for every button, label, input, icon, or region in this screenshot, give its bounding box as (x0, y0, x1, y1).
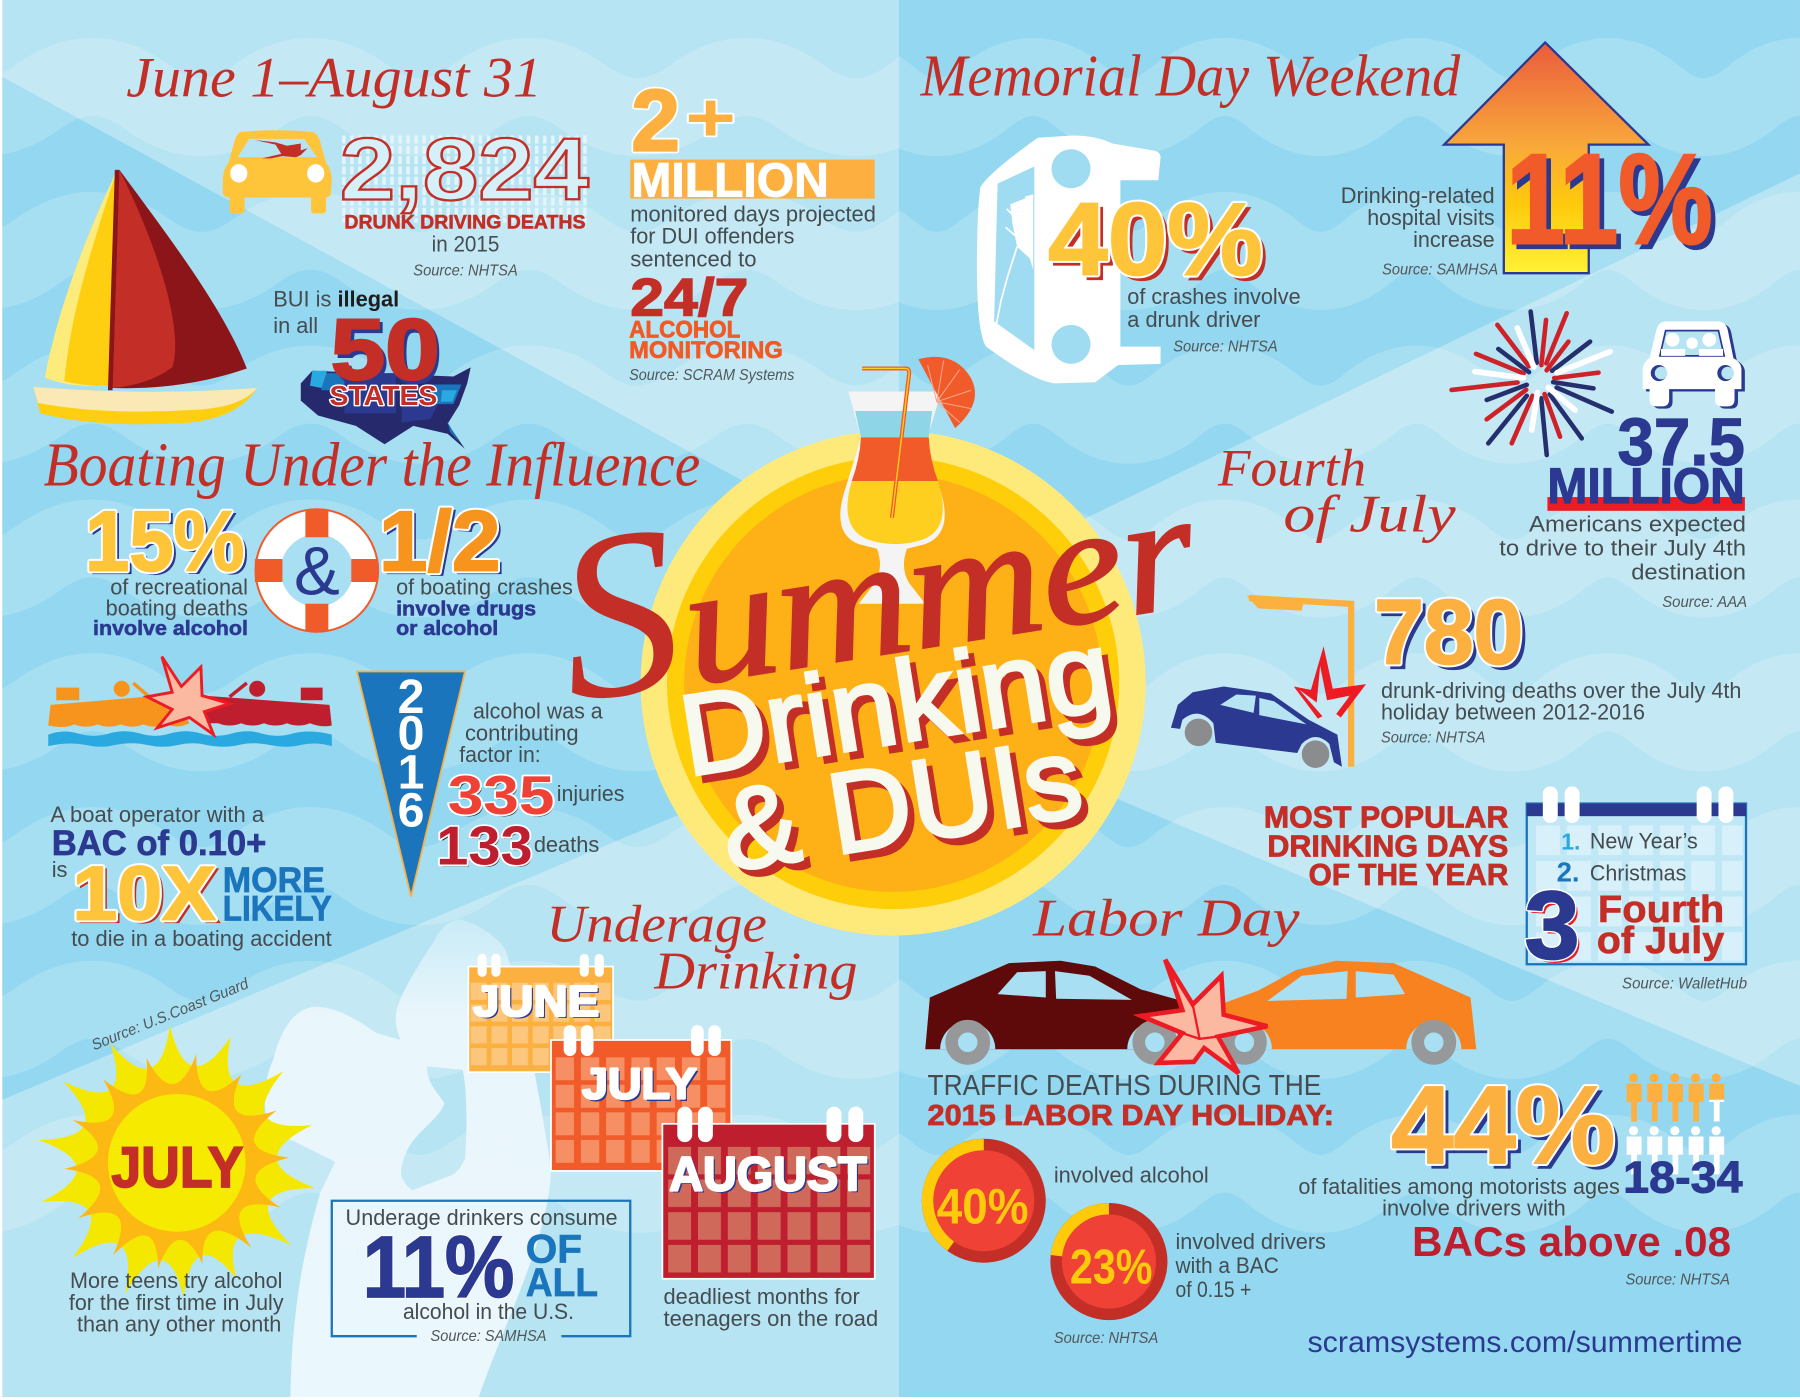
stat: 15% of recreational boating deaths: 15% (85, 494, 245, 589)
stat: BAC of 0.10+ 10X more likely: A boat operator with a (51, 802, 265, 827)
stat: 2+ million monitored days: monitored days projected (630, 202, 876, 227)
stat: BAC of 0.10+ 10X more likely: is (52, 857, 68, 882)
text: alcohol contributing factor: deaths (534, 832, 599, 857)
callout: underage drinkers 11%: alcohol in the U.S. (403, 1299, 574, 1324)
stat: BUI illegal in all 50 states: BUI is illegal (273, 286, 399, 311)
stat: 44% fatalities: 44% (1391, 1064, 1615, 1187)
icon: car with passengers (1643, 321, 1745, 409)
text: alcohol contributing factor (436, 699, 625, 879)
source: U.S. Coast Guard: Source: U.S.Coast Guard (89, 975, 252, 1054)
stat: 1/2 of boating crashes: 1/2 (379, 494, 501, 589)
stat: 11% hospital visits (1341, 128, 1717, 278)
stat: 2,824 drunk driving deaths: in 2015 (432, 231, 499, 256)
icon: two cars colliding (925, 960, 1476, 1073)
stat: 2+ million monitored days: sentenced to (630, 246, 757, 271)
text: deadliest months: teenagers on the road (664, 1306, 878, 1331)
stat: 44% fatalities: 44% (1396, 1068, 1620, 1191)
calendar: August: AUGUST (669, 1147, 867, 1201)
stat: BAC of 0.10+ 10X more likely: BAC of 0.10+ (52, 823, 266, 863)
stat: 37.5 million Americans: MILLION (1547, 457, 1745, 514)
stat: 40% crashes involve a drunk driver: 40% (1048, 180, 1263, 296)
stat: 1/2 of boating crashes: involve drugs (396, 597, 536, 620)
main title: Summer: S (541, 474, 696, 753)
stat: BUI illegal in all 50 states: 50 (331, 302, 440, 398)
stat: 40% crashes involve a drunk driver: 40% (1053, 185, 1267, 301)
link: website: scramsystems.com/summertime (1308, 1326, 1743, 1359)
stat: BUI illegal in all 50 states: STATES (329, 380, 437, 411)
stat: 37.5 million Americans: Americans expected (1529, 511, 1746, 536)
calendar: June: JUNE (473, 978, 599, 1026)
stat: 37.5 million Americans: 37.5 (1617, 406, 1745, 480)
stat: BAC of 0.10+ 10X more likely: to die in a boating accident (71, 926, 332, 951)
stat: 780 drunk-driving deaths: 780 (1374, 581, 1523, 683)
calendar: June (468, 954, 613, 1072)
stat: 40% crashes involve a drunk driver: a drunk driver (1127, 307, 1260, 332)
stat: BUI illegal in all 50 states: in all (273, 313, 318, 338)
pennant: 2016: 2 (398, 670, 424, 724)
calendar: July: JULY (582, 1061, 697, 1109)
stat: BAC of 0.10+ 10X more likely: 10X (72, 851, 216, 936)
main title: & DUIs: & DUIs (713, 713, 1090, 896)
text: more teens try alcohol (69, 1268, 284, 1337)
text: involved drivers BAC: with a BAC (1175, 1253, 1279, 1278)
text: alcohol contributing factor: 133 (436, 814, 533, 876)
calendar: top drinking days: 1. (1561, 828, 1580, 854)
main title: & DUIs: & DUIs (720, 720, 1097, 903)
stat: 15% of recreational boating deaths: 15% (85, 494, 245, 589)
icon: car hitting lamp post (1171, 596, 1366, 768)
heading: traffic deaths labor day: 2015 LABOR DAY HOLIDAY: (928, 1100, 1334, 1132)
stat: 2+ million monitored days (629, 72, 876, 384)
stat: 15% of recreational boating deaths: of recreational (110, 575, 248, 600)
silhouette: person drinking (265, 919, 551, 1397)
stat: 2+ million monitored days: 24/7 (630, 269, 748, 328)
stat: 44% fatalities: 44% (1391, 1064, 1615, 1187)
calendar: top drinking days: 3 (1528, 876, 1583, 983)
stat: 780 drunk-driving deaths: drunk-driving deaths over the July 4th (1381, 678, 1741, 703)
calendar: July: JULY (584, 1063, 699, 1111)
chart: donut 23%: 23% (1070, 1239, 1153, 1294)
calendar: August (662, 1107, 875, 1279)
calendar: top drinking days: New Year’s (1590, 828, 1698, 853)
central medallion sun (641, 430, 1146, 936)
text: more teens try alcohol: More teens try alcohol (70, 1268, 282, 1293)
calendar: top drinking days: 3 (1524, 873, 1580, 980)
heading: Memorial Day Weekend: Memorial Day Weekend (920, 42, 1460, 108)
icon: cocktail glass with orange slice (840, 357, 975, 604)
stat: 780 drunk-driving deaths: holiday between 2012-2016 (1381, 700, 1645, 725)
heading: Underage Drinking (546, 895, 858, 1000)
text: alcohol contributing factor: 335 (450, 766, 556, 828)
calendar: top drinking days: Christmas (1590, 860, 1686, 885)
pennant: 2016: 0 (398, 707, 424, 761)
text: involved drivers BAC: involved drivers (1176, 1229, 1326, 1254)
stat: 2+ million monitored days: Source: SCRAM Systems (629, 367, 795, 384)
stat: 11% hospital visits: increase (1413, 227, 1495, 252)
stat: 780 drunk-driving deaths: 780 (1374, 581, 1523, 683)
stat: 2,824 drunk driving deaths (340, 120, 589, 280)
text: alcohol contributing factor: factor in: (459, 742, 541, 767)
icon: white wrecked car (977, 135, 1161, 383)
stat: 40% crashes involve a drunk driver: 40% (1048, 180, 1263, 296)
heading: most popular drinking days: DRINKING DAYS (1267, 828, 1508, 863)
stat: 780 drunk-driving deaths: Source: NHTSA (1381, 730, 1485, 747)
heading: Fourth of July: Fourth (1217, 440, 1366, 498)
text: involved drivers BAC: Source: NHTSA (1054, 1330, 1158, 1347)
heading: Fourth of July (1217, 440, 1456, 543)
text: more teens try alcohol: for the first time in July (69, 1290, 284, 1315)
stat: 11% hospital visits: Drinking-related (1341, 183, 1495, 208)
callout: underage drinkers 11%: Source: SAMHSA (431, 1328, 546, 1345)
stat: 780 drunk-driving deaths: 780 (1379, 586, 1528, 688)
callout: underage drinkers 11%: 11% (363, 1219, 514, 1316)
stat: 15% of recreational boating deaths: 15% (88, 496, 248, 591)
heading: traffic deaths labor day: TRAFFIC DEATHS DURING THE (928, 1070, 1321, 1102)
heading: Underage Drinking: Drinking (653, 942, 858, 1000)
stat: BAC of 0.10+ 10X more likely: 10X (72, 851, 216, 936)
pennant: 2016: 1 (398, 746, 424, 800)
stat: BAC of 0.10+ 10X more likely: 10X (76, 854, 219, 939)
text: fatalities among motorists: of fatalities among motorists ages (1298, 1174, 1620, 1199)
stat: 15% of recreational boating deaths: boating deaths (106, 595, 248, 620)
pennant: 2016 (357, 670, 465, 897)
stat: BAC of 0.10+ 10X more likely: MORE (223, 860, 325, 900)
icon: life ring with ampersand: & (294, 533, 340, 610)
calendar: August: AUGUST (672, 1150, 869, 1204)
main title: Summer: ummer (670, 454, 1208, 721)
main title: Drinking: Drinking (678, 613, 1127, 808)
stat: BAC of 0.10+ 10X more likely: LIKELY (223, 889, 332, 929)
chart: donut 40%: 40% (937, 1178, 1029, 1235)
stat: 40% crashes involve a drunk driver: of crashes involve (1127, 284, 1301, 309)
text: alcohol contributing factor: 335 (448, 764, 554, 826)
heading: traffic deaths labor day (928, 1070, 1334, 1132)
heading: June 1 - August 31: June 1–August 31 (126, 46, 542, 109)
text: deadliest months: deadliest months for (664, 1284, 860, 1309)
stat: BUI illegal in all 50 states: 50 (334, 305, 442, 401)
stat: 2+ million monitored days: MILLION (631, 153, 829, 207)
chart: donut 23% (1050, 1203, 1167, 1320)
stat: 1/2 of boating crashes: 1/2 (382, 496, 504, 591)
heading: Boating Under the Influence: Boating Under the Influence (44, 432, 700, 500)
text: alcohol contributing factor: contributing (465, 720, 579, 745)
stat: 37.5 million Americans: Source: AAA (1662, 594, 1747, 611)
callout: underage drinkers 11%: Underage drinkers consume (346, 1205, 618, 1230)
source: WalletHub: Source: WalletHub (1622, 975, 1748, 992)
heading: Labor Day: Labor Day (1032, 890, 1300, 948)
stat: 2+ million monitored days: for DUI offenders (630, 223, 794, 248)
chart: donut 40% (922, 1139, 1046, 1263)
text: involved alcohol: involved alcohol (1054, 1162, 1209, 1187)
icon: two boats crashing (48, 657, 332, 747)
callout: underage drinkers 11% (332, 1201, 630, 1345)
stat: 37.5 million Americans (1499, 406, 1747, 611)
calendar: July (551, 1025, 731, 1171)
stat: 37.5 million Americans: to drive to their July 4th (1499, 536, 1746, 561)
stat: 2+ million monitored days: + (685, 79, 736, 156)
stat: 1/2 of boating crashes: 1/2 (379, 494, 501, 589)
heading: most popular drinking days: MOST POPULAR (1264, 800, 1508, 835)
stat: 40% crashes involve a drunk driver (1048, 180, 1301, 355)
calendar: top drinking days: of July (1597, 920, 1724, 962)
stat: 2+ million monitored days: MONITORING (629, 337, 783, 364)
icon: people 18-34: 18-34 (1623, 1153, 1743, 1203)
stat: 40% crashes involve a drunk driver: Source: NHTSA (1173, 338, 1278, 355)
stat: 780 drunk-driving deaths (1374, 581, 1741, 747)
stat: 2+ million monitored days: ALCOHOL (629, 316, 740, 343)
stat: 2,824 drunk driving deaths: 2,824 (340, 120, 589, 219)
stat: 1/2 of boating crashes (379, 494, 573, 640)
stat: 2+ million monitored days: 2 (631, 72, 680, 169)
stat: 11% hospital visits: 11% (1511, 133, 1717, 276)
stat: 1/2 of boating crashes: or alcohol (396, 617, 498, 640)
stat: BUI illegal in all 50 states (273, 286, 471, 449)
heading: Fourth of July: of July (1283, 485, 1456, 543)
stat: 11% hospital visits: 11% (1506, 128, 1713, 271)
icon: life ring with ampersand (255, 510, 378, 631)
text: more teens try alcohol: than any other month (77, 1312, 281, 1337)
callout: underage drinkers 11%: 11% (363, 1219, 514, 1316)
calendar: top drinking days: 3 (1524, 873, 1580, 980)
pennant: 2016: 6 (398, 784, 424, 838)
stat: 11% hospital visits: hospital visits (1367, 205, 1495, 230)
stat: 15% of recreational boating deaths (85, 494, 248, 640)
text: fatalities among motorists (1298, 1174, 1731, 1289)
calendar: top drinking days: 2. (1557, 857, 1580, 888)
arrow: up with gradient (1444, 42, 1648, 273)
stat: 2,824 drunk driving deaths: Source: NHTSA (413, 263, 518, 280)
main title: Summer (541, 454, 1208, 753)
callout: underage drinkers 11%: OF (526, 1227, 582, 1272)
calendar: top drinking days: Fourth (1598, 889, 1724, 931)
text: involved drivers BAC: of 0.15 + (1176, 1277, 1251, 1302)
stat: 37.5 million Americans: destination (1631, 560, 1746, 585)
stat: 11% hospital visits: Source: SAMHSA (1382, 261, 1498, 278)
stat: BAC of 0.10+ 10X more likely (51, 802, 332, 951)
text: fatalities among motorists: Source: NHTSA (1625, 1272, 1730, 1289)
icon: people 18-34 (1623, 1073, 1743, 1203)
stat: 15% of recreational boating deaths: involve alcohol (93, 617, 248, 640)
heading: most popular drinking days (1264, 800, 1508, 892)
icon: fireworks (1452, 312, 1612, 455)
main title: Drinking: Drinking (672, 606, 1120, 801)
icon: sailboat (33, 170, 257, 424)
text: deadliest months (664, 1284, 878, 1331)
stat: 2,824 drunk driving deaths: DRUNK DRIVING DEATHS (344, 211, 585, 233)
text: alcohol contributing factor: alcohol was a (473, 699, 604, 724)
calendar: June: JUNE (475, 980, 602, 1028)
callout: underage drinkers 11%: ALL (526, 1260, 598, 1305)
icon: yellow car with cracked windshield (223, 130, 332, 214)
heading: Underage Drinking: Underage (546, 895, 767, 953)
heading: most popular drinking days: OF THE YEAR (1309, 857, 1508, 892)
calendar: top drinking days (1524, 786, 1746, 983)
icon: sun with July (38, 1025, 316, 1297)
text: involved drivers BAC (1054, 1229, 1326, 1347)
text: fatalities among motorists: involve drivers with (1382, 1196, 1566, 1221)
icon: sun with July: JULY (111, 1136, 243, 1200)
stat: 1/2 of boating crashes: of boating crashes (396, 575, 573, 600)
text: fatalities among motorists: BACs above .08 (1412, 1219, 1731, 1265)
text: alcohol contributing factor: 133 (439, 817, 534, 879)
text: alcohol contributing factor: injuries (557, 781, 625, 806)
stat: 2+ million monitored days: 2 (631, 72, 680, 169)
